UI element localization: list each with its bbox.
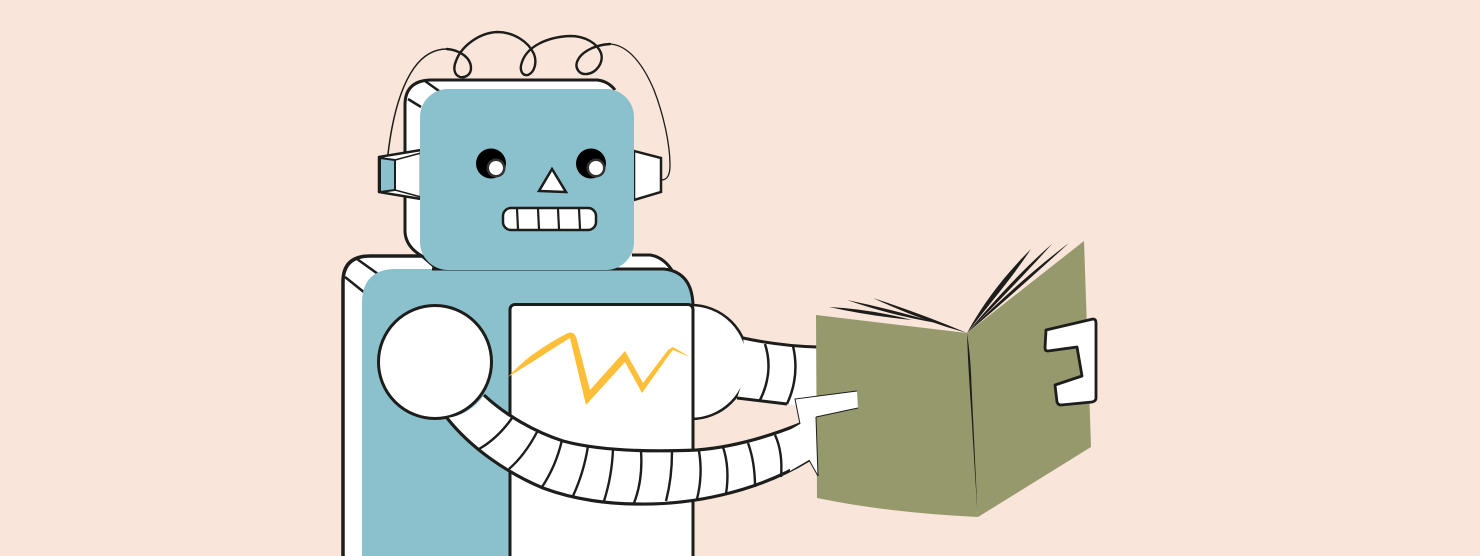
book left cover [816, 315, 978, 517]
body top outline [432, 269, 693, 305]
front arm [447, 395, 818, 504]
left eye [476, 148, 506, 178]
back arm [737, 338, 818, 410]
book spine [967, 333, 978, 513]
left shoulder [378, 306, 492, 418]
right hand gripping book [1045, 319, 1096, 405]
book right cover [967, 241, 1091, 517]
book left pages [829, 298, 967, 333]
robot head back shell [405, 80, 615, 269]
arm segment rings [479, 418, 781, 503]
left hand on book [788, 391, 858, 476]
right shoulder [634, 305, 748, 419]
hair wire [388, 32, 670, 180]
robot body front [362, 269, 693, 556]
chest panel [510, 304, 693, 556]
book right pages [967, 243, 1069, 333]
right ear [634, 151, 661, 200]
book [816, 241, 1091, 517]
mouth [503, 208, 596, 230]
yellow zigzag line [508, 333, 690, 405]
nose [539, 169, 566, 192]
robot body back shell [343, 255, 673, 556]
left ear [379, 150, 421, 199]
robot head face [420, 89, 634, 270]
right eye [576, 148, 606, 178]
